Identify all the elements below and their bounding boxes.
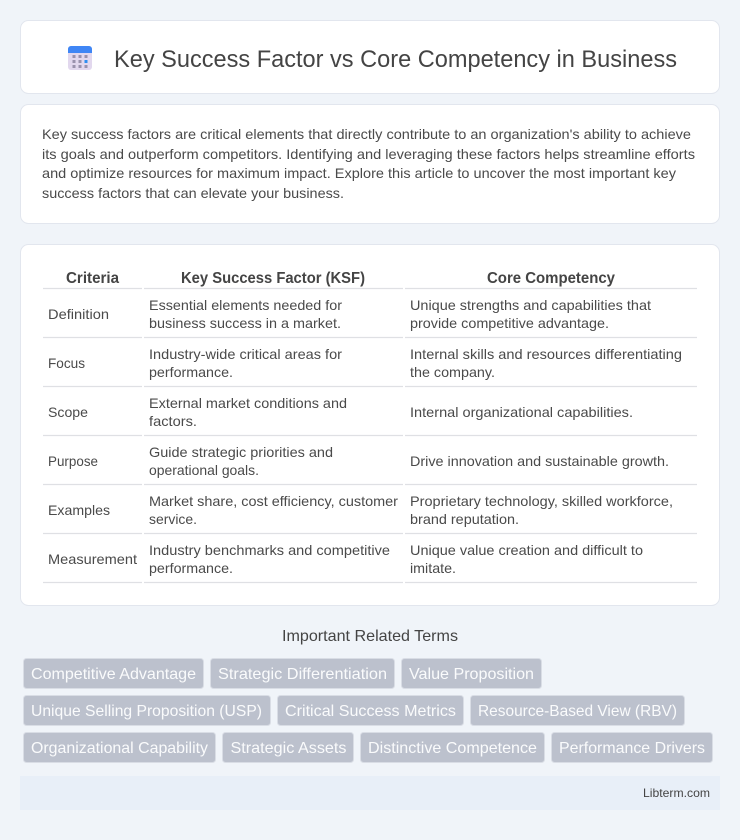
tag: competitive advantage: Competitive Advantage: [31, 666, 196, 683]
footer: Libterm.com: [643, 786, 710, 800]
row: examples: [48, 493, 673, 527]
table header: Key Success Factor (KSF): [181, 270, 365, 287]
row: scope: Scope: [48, 404, 88, 420]
row: purpose: Purpose: [48, 453, 98, 469]
tag: strategic assets: Strategic Assets: [230, 740, 346, 757]
tag: value proposition: [402, 658, 542, 688]
related term tags: [24, 658, 712, 762]
row: measurement: Industry benchmarks and competitive: [149, 542, 390, 558]
row: definition: Essential elements needed for: [149, 297, 342, 313]
tag: critical success metrics: Critical Success Metrics: [285, 703, 456, 720]
intro text: its goals and outperform competitors. Identifying and leveraging these factors helps streamline efforts: [42, 146, 695, 162]
row: definition: business success in a market.: [149, 315, 341, 331]
tag: unique selling proposition: Unique Selling Proposition (USP): [31, 703, 262, 720]
tag: resource-based view: Resource-Based View (RBV): [478, 703, 677, 720]
row: scope: Internal organizational capabilities.: [410, 404, 633, 420]
row: purpose: Guide strategic priorities and: [149, 444, 333, 460]
row: focus: Focus: [48, 355, 85, 371]
tag: resource-based view: [470, 696, 684, 726]
tag: unique selling proposition: [24, 696, 270, 726]
tag: distinctive competence: Distinctive Competence: [368, 740, 537, 757]
row: purpose: Drive innovation and sustainable growth.: [410, 453, 669, 469]
tag: strategic assets: [222, 732, 354, 762]
icon: calendar: [68, 46, 92, 70]
tag: distinctive competence: [360, 732, 544, 762]
row: examples: Examples: [48, 502, 110, 518]
footer: [20, 776, 720, 810]
tag: organizational capability: [24, 732, 216, 762]
row: purpose: operational goals.: [149, 462, 259, 478]
tag: organizational capability: Organizational Capability: [31, 740, 208, 757]
row: focus: the company.: [410, 364, 495, 380]
row: examples: service.: [149, 511, 197, 527]
tag: performance drivers: Performance Drivers: [559, 740, 705, 757]
intro text: Key success factors are critical elements that directly contribute to an organization's ability to achieve: [42, 126, 691, 142]
row: scope: [48, 395, 633, 429]
row: measurement: performance.: [149, 560, 233, 576]
row: measurement: Measurement: [48, 551, 137, 567]
title: Key Success Factor vs Core Competency in Business: [114, 46, 677, 73]
table header: Core Competency: [487, 270, 615, 287]
tag: competitive advantage: [24, 658, 204, 688]
row: scope: factors.: [149, 413, 197, 429]
table header: Criteria: [66, 270, 119, 287]
panel: comparison table: [20, 244, 720, 606]
row: definition: Definition: [48, 306, 109, 322]
tag: strategic differentiation: Strategic Differentiation: [218, 666, 387, 683]
tag: performance drivers: [552, 732, 712, 762]
panel: header: [20, 20, 720, 94]
row: focus: performance.: [149, 364, 233, 380]
row: measurement: Unique value creation and difficult to: [410, 542, 643, 558]
row: measurement: [48, 542, 643, 576]
row: focus: [48, 346, 682, 380]
panel: intro: [20, 104, 720, 224]
row: purpose: [48, 444, 669, 478]
tag: critical success metrics: [278, 696, 464, 726]
row: definition: Unique strengths and capabilities that: [410, 297, 651, 313]
intro text: [42, 126, 695, 201]
row: examples: Proprietary technology, skilled workforce,: [410, 493, 673, 509]
row: measurement: imitate.: [410, 560, 456, 576]
heading: related terms: Important Related Terms: [282, 628, 458, 645]
table header: [66, 270, 615, 287]
tag: value proposition: Value Proposition: [409, 666, 534, 683]
row: definition: provide competitive advantage.: [410, 315, 609, 331]
tag: strategic differentiation: [210, 658, 394, 688]
row: focus: Industry-wide critical areas for: [149, 346, 342, 362]
row: examples: brand reputation.: [410, 511, 519, 527]
row: scope: External market conditions and: [149, 395, 347, 411]
row: focus: Internal skills and resources differentiating: [410, 346, 682, 362]
row: definition: [48, 297, 651, 331]
intro text: success factors that can elevate your business.: [42, 185, 344, 201]
intro text: and optimize resources for maximum impact. Explore this article to uncover the most important key: [42, 165, 676, 181]
row: examples: Market share, cost efficiency, customer: [149, 493, 398, 509]
